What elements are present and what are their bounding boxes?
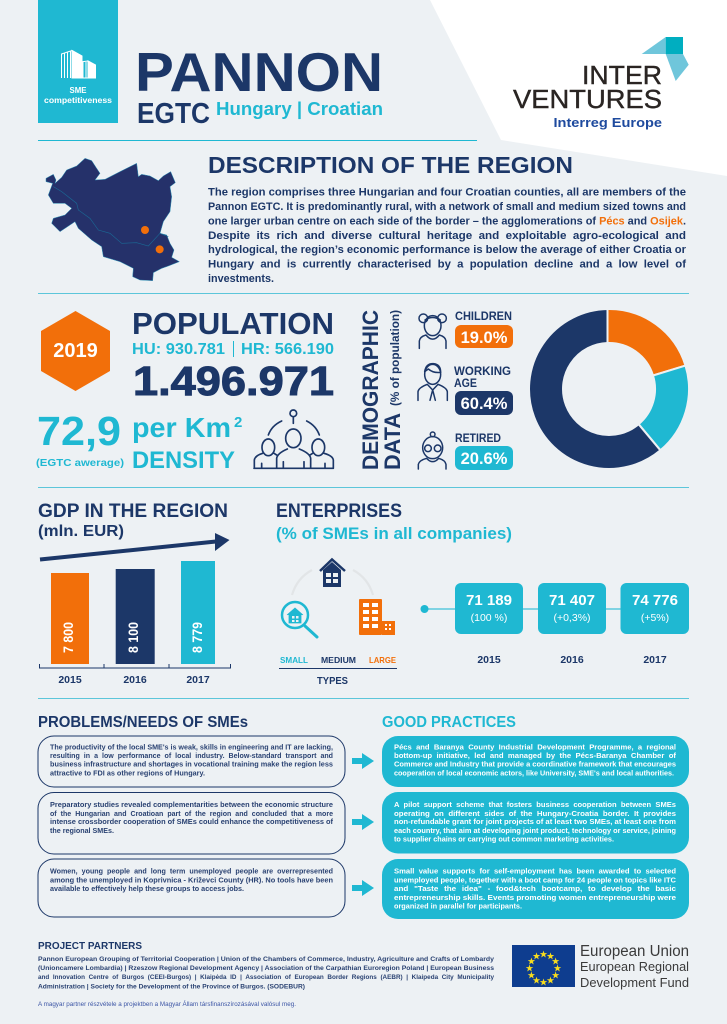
badge: SME competitiveness: SME	[70, 86, 87, 95]
section: description of the region: DESCRIPTION OF THE REGION	[208, 152, 573, 178]
arrow 1	[352, 753, 374, 769]
heading: enterprises: ENTERPRISES	[276, 501, 402, 522]
practice box 1: Pécs and Baranya County Industrial Development Programme, a regional	[394, 744, 676, 752]
logo: Inter Ventures Interreg Europe: Interreg Europe	[554, 115, 662, 130]
practice box 1: Commerce and Industry that provide a coordinative framework that encourages	[394, 762, 676, 769]
practice box 3: organized in parallel for participants.	[394, 904, 522, 910]
heading: demographic data: (% of population)	[390, 310, 402, 406]
icon: medium house	[320, 560, 345, 587]
section: description of the region: investments.	[208, 273, 274, 285]
bar chart: GDP: 7 800	[60, 622, 76, 653]
problem box 3	[38, 859, 345, 917]
logo: European Union: Development Fund	[580, 975, 689, 990]
practice box 1	[382, 736, 689, 787]
bar chart: GDP: 2016	[123, 674, 147, 686]
section: description of the region: Despite its rich and diverse cultural heritage and exploitable agro-ecological and	[208, 230, 686, 242]
box: 2015	[455, 583, 523, 666]
heading: problems/needs: PROBLEMS/NEEDS OF SMEs	[38, 714, 248, 731]
project partners: and Innovation Centre of Burgos (CEEI-Burgos) | Klaipėda ID | Association of European Border Regions (AEBR) | Klaipeda City Municipality	[38, 974, 494, 981]
box: 2016: 71 407	[549, 592, 595, 609]
practice box 2: A pilot support scheme that fosters business cooperation between SMEs	[394, 802, 676, 809]
title: PANNON EGTC	[135, 41, 383, 130]
practice box 2: to supplier chains or carrying out common marketing activities.	[394, 836, 614, 844]
project partners: Pannon European Grouping of Territorial Cooperation | Union of the Chambers of Commerce, Industry, Agriculture and Crafts of Lombardy	[38, 956, 494, 963]
box: 2017: 74 776	[632, 592, 678, 609]
practice box 3: and "Taste the idea" - food&tech bootcamp, to develop the basic	[394, 886, 676, 893]
heading: demographic data: DATA	[380, 413, 405, 470]
demographic: children: CHILDREN	[455, 309, 512, 323]
box: 2015: (100 %)	[471, 612, 507, 624]
heading: enterprises	[276, 501, 512, 543]
slice: children	[608, 309, 686, 376]
logo: Inter Ventures Interreg Europe	[513, 37, 689, 130]
practice box 2	[382, 792, 689, 854]
icon: people network	[254, 410, 333, 468]
section: description of the region: one larger urban centre on each side of the border – the agglomerations of Pécs and Osijek.	[208, 216, 686, 228]
title: PANNON EGTC: Hungary | Croatian	[216, 99, 383, 119]
demographic: working age	[418, 364, 513, 415]
heading: GDP in the region: (mln. EUR)	[38, 523, 124, 540]
heading: GDP in the region	[38, 501, 228, 540]
box: 2016: (+0,3%)	[553, 612, 591, 624]
company types diagram	[279, 560, 397, 687]
section: description of the region: Hungary and is currently characterised by a population decline and a low level of	[208, 258, 686, 270]
logo: Inter Ventures Interreg Europe: INTER	[582, 60, 662, 90]
problem box 1: business infrastructure and shortages in vocational training make the region less	[50, 762, 333, 769]
problem box 2: the regional SMEs.	[50, 828, 114, 835]
box: 2016	[538, 583, 606, 666]
problem box 2: Preparatory studies revealed complementarities between the economic structure	[50, 802, 333, 809]
logo: European Union: European Union	[580, 943, 689, 960]
practice box 3: entrepreneurship skills. Events promoting women entrepreneurship were	[394, 895, 676, 902]
river	[53, 187, 168, 246]
icon: large building	[359, 599, 395, 635]
slice: retired	[639, 366, 689, 450]
demographic: retired	[418, 431, 513, 470]
logo: European Union: European Regional	[580, 959, 689, 974]
problem box 2: intense crossborder cooperation of SMEs could enhance the competitiveness of	[50, 819, 334, 826]
heading: demographic data: DEMOGRAPHIC	[358, 310, 383, 470]
project partners: PROJECT PARTNERS	[38, 940, 142, 952]
heading: demographic data	[358, 310, 405, 470]
demographic: working age: AGE	[454, 376, 477, 390]
box: 2015: 71 189	[466, 592, 512, 609]
title: PANNON EGTC: EGTC	[137, 98, 210, 130]
company types diagram: TYPES	[317, 676, 348, 687]
problem box 1	[38, 736, 345, 787]
city markers	[141, 226, 164, 253]
company types diagram: LARGE	[369, 655, 396, 665]
problem box 1: resulting in a low performance of local industry. Below-standard transport and	[50, 753, 333, 760]
problem box 2: of the Hungarian and Croatioan part of the region and concluded that a more	[50, 811, 333, 818]
density figures: 72,9	[37, 408, 121, 454]
arrow: GDP growth	[40, 533, 230, 560]
bar chart: GDP: 8 779	[189, 622, 205, 653]
box: 2016: 2016	[560, 654, 584, 666]
demographic: working age: WORKING	[454, 364, 511, 378]
heading: good practices: GOOD PRACTICES	[382, 714, 516, 731]
company types diagram: MEDIUM	[321, 655, 356, 665]
density figures: 2	[234, 414, 242, 431]
density figures: (EGTC awerage)	[36, 457, 124, 469]
density figures: DENSITY	[132, 447, 235, 474]
practice box 1: cooperation of local economic actors, like University, SME's and local authorities.	[394, 770, 674, 777]
bar chart: GDP: 8 100	[125, 622, 141, 653]
box: 2017: 2017	[643, 654, 667, 666]
population figures	[132, 306, 334, 404]
section: description of the region: Pannon EGTC. It is predominantly rural, with a network of small and medium sized towns and	[208, 201, 686, 213]
demographic: retired: 20.6%	[461, 450, 508, 468]
icon: worker	[418, 364, 447, 400]
badge: SME competitiveness	[38, 0, 118, 123]
icon: child	[419, 314, 446, 348]
demographic: retired: RETIRED	[455, 431, 501, 445]
practice box 3: unemployed people, together with a boot camp for 24 people on topics like ITC	[394, 878, 676, 884]
problem box 2	[38, 792, 345, 854]
year hexagon	[41, 311, 110, 391]
problem box 1: attractive to FDI as other regions of Hungary.	[50, 770, 205, 777]
population figures: 1.496.971	[133, 358, 334, 404]
problem box 1: The productivity of the local SME's is weak, skills in engineering and IT are lacking,	[50, 744, 333, 752]
population figures: POPULATION	[132, 306, 334, 341]
practice box 2: operating on different sides of the Hungary-Croatia border. It provides	[394, 811, 676, 818]
section: description of the region: hydrological, the region’s economic performance is below the average of either Croatia or	[208, 244, 687, 256]
problem box 3: among the unemployed in Koprivnica - Križevci County (HR). No tools have been	[50, 878, 333, 884]
timeline: enterprises by year	[420, 583, 689, 666]
practice box 3	[382, 859, 689, 919]
practice box 1: bottom-up initiative, led and managed by the Pécs-Baranya Chamber of	[394, 753, 677, 760]
section: description of the region	[208, 152, 687, 285]
section: description of the region: The region comprises three Hungarian and four Croatian counties, all are members of the	[208, 186, 686, 198]
funding note: A magyar partner részvétele a projektben a Magyar Állam társfinanszírozásával valósul meg.	[38, 999, 296, 1008]
bar chart: GDP: 2017	[186, 674, 210, 686]
logo: European Union	[512, 943, 689, 990]
icon: buildings	[62, 50, 96, 78]
box: 2017	[620, 583, 689, 666]
population figures: HU: 930.781	[132, 341, 225, 358]
heading: GDP in the region: GDP IN THE REGION	[38, 501, 228, 522]
demographic: children: 19.0%	[461, 329, 508, 347]
arrow 2	[352, 814, 374, 830]
bar chart: GDP	[40, 561, 230, 686]
project partners: Administration | Society for the Development of the Province of Burgos. (SODEBUR)	[38, 984, 305, 990]
problem box 3: Women, young people and long term unemployed people are overrepresented	[50, 868, 333, 876]
practice box 2: non-refundable grant for joint projects of at least two SMEs, at least one from	[394, 819, 676, 826]
box: 2017: (+5%)	[641, 612, 669, 624]
slice: working age	[529, 309, 660, 469]
problem box 3: available to effectively help these groups to access jobs.	[50, 886, 244, 893]
demographic: children	[419, 309, 513, 348]
demographic: working age: 60.4%	[461, 395, 508, 413]
map of the region	[46, 158, 179, 281]
icon: senior	[418, 432, 446, 469]
donut chart	[529, 309, 689, 469]
bar chart: GDP: 2015	[58, 674, 82, 686]
title: PANNON EGTC: PANNON	[135, 41, 383, 103]
practice box 2: each country, that aim at developing joint product, technology or service, joining	[394, 828, 676, 835]
company types diagram: SMALL	[280, 655, 308, 665]
density figures	[36, 408, 242, 474]
logo: Inter Ventures Interreg Europe: VENTURES	[513, 84, 662, 114]
year hexagon: 2019	[53, 340, 98, 362]
practice box 3: Small value supports for self-employment has been awarded to selected	[394, 868, 676, 876]
box: 2015: 2015	[477, 654, 501, 666]
icon: small house magnifier	[282, 602, 317, 637]
project partners: (Unioncamere Lombardia) | Rzeszow Regional Development Agency | Association of the Carpathian Euroregion Poland | European Business	[38, 965, 494, 972]
badge: SME competitiveness: competitiveness	[44, 96, 113, 105]
flag	[512, 945, 575, 987]
project partners	[38, 940, 494, 990]
arrow 3	[352, 880, 374, 896]
heading: enterprises: (% of SMEs in all companies)	[276, 524, 512, 543]
density figures: per Km	[132, 412, 231, 443]
population figures: HR: 566.190	[241, 341, 334, 358]
